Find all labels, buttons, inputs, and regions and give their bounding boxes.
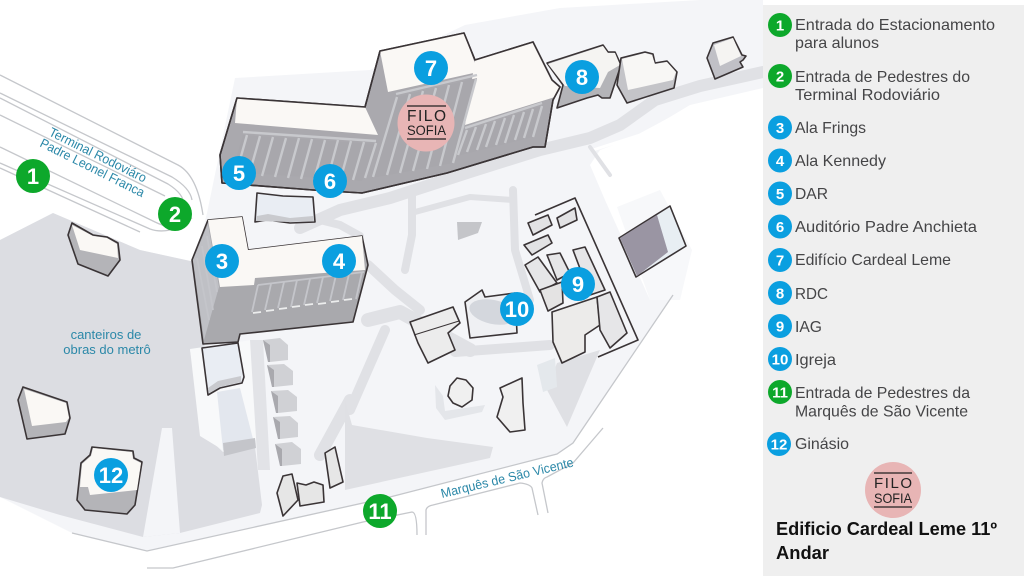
map marker 9 <box>561 267 595 301</box>
map marker 4: 4 <box>333 249 346 274</box>
legend item 2 <box>768 64 970 104</box>
logo on map: Filosofia: FILO <box>407 108 446 125</box>
building: spiky pavilion <box>497 378 525 432</box>
roads: Terminal Rodoviário <box>0 75 203 232</box>
legend item 5 <box>768 182 828 206</box>
map marker 8: 8 <box>576 65 588 90</box>
building: east of RDC <box>617 52 677 103</box>
buildings: row of five blocks <box>263 338 301 466</box>
legend item 11: Marquês de São Vicente <box>795 404 968 420</box>
building: round pavilion <box>448 378 473 407</box>
legend item 7: 7 <box>776 252 784 270</box>
building: Ala Frings and Ala Kennedy <box>192 217 368 344</box>
legend item 3: Ala Frings <box>795 120 866 137</box>
building: Ginásio <box>77 447 142 514</box>
legend item 6: Auditório Padre Anchieta <box>795 219 977 236</box>
building: DAR annex <box>255 193 315 223</box>
legend item 10 <box>768 347 836 371</box>
sculpture <box>457 222 482 240</box>
building: west block <box>18 387 70 439</box>
logo in legend: Filosofia <box>865 462 921 518</box>
map marker 2 <box>158 197 192 231</box>
legend item 3 <box>768 116 866 140</box>
logo in legend: Filosofia: FILO <box>874 475 912 492</box>
label: canteiros de obras do metrô: obras do metrô <box>63 342 151 357</box>
legend item 9: 9 <box>776 318 784 336</box>
map marker 6: 6 <box>324 169 336 194</box>
building: Edifício Cardeal Leme and Auditório <box>220 33 560 193</box>
building: below Ala Frings <box>202 343 256 456</box>
map marker 2: 2 <box>169 202 181 227</box>
map marker 3 <box>205 244 239 278</box>
legend item 3: 3 <box>776 120 784 137</box>
building: small pale block <box>537 358 557 392</box>
roads: Marquês de São Vicente <box>72 295 673 568</box>
legend item 5: 5 <box>776 186 784 203</box>
legend item 10: 10 <box>772 352 788 368</box>
legend item 6 <box>768 214 977 238</box>
map marker 11: 11 <box>368 499 392 524</box>
map marker 5 <box>222 156 256 190</box>
buildings: south cluster <box>277 447 343 516</box>
IAG complex <box>524 198 638 363</box>
legend item 6: 6 <box>776 219 784 236</box>
legend item 1 <box>768 13 995 52</box>
legend item 12: 12 <box>771 436 787 454</box>
building: west of Igreja <box>410 307 460 363</box>
legend item 5: DAR <box>795 186 828 203</box>
map marker 4 <box>322 244 356 278</box>
legend item 8: 8 <box>776 286 784 302</box>
label: Padre Leonel Franca: Padre Leonel Franca <box>38 135 148 200</box>
legend item 8 <box>768 281 828 305</box>
label: Marquês de São Vicente: Marquês de São Vicente <box>439 455 575 501</box>
legend item 7 <box>768 248 951 272</box>
legend item 8: RDC <box>795 286 828 303</box>
map marker 9: 9 <box>572 272 584 297</box>
map marker 7: 7 <box>425 56 437 81</box>
logo in legend: Filosofia: SOFIA <box>874 490 913 506</box>
building: northeast <box>707 37 746 79</box>
building: Igreja <box>465 290 519 338</box>
logo on map: Filosofia: SOFIA <box>407 122 447 138</box>
legend item 1: Entrada do Estacionamento <box>795 17 995 34</box>
map marker 7 <box>414 51 448 85</box>
legend item 1: para alunos <box>795 35 879 52</box>
logo on map: Filosofia <box>398 94 454 152</box>
map marker 12: 12 <box>99 463 123 488</box>
building: RDC <box>547 45 621 108</box>
legend item 9: IAG <box>795 319 822 336</box>
legend item 10: Igreja <box>795 352 836 369</box>
legend item 4 <box>768 148 886 172</box>
legend item 7: Edifício Cardeal Leme <box>795 252 951 269</box>
building: dark block <box>619 206 686 277</box>
legend item 2: Entrada de Pedestres do <box>795 69 970 86</box>
label: canteiros de obras do metrô: canteiros de <box>71 327 141 342</box>
legend item 1: 1 <box>776 18 784 34</box>
map: ground and paths <box>0 0 763 551</box>
map marker 3: 3 <box>216 249 228 274</box>
legend item 11 <box>768 380 970 420</box>
map marker 12 <box>94 458 128 492</box>
map marker 1: 1 <box>27 164 39 189</box>
legend item 2: 2 <box>776 68 784 86</box>
map marker 11 <box>363 494 397 528</box>
legend item 12: Ginásio <box>795 436 849 453</box>
map marker 6 <box>313 164 347 198</box>
legend item 4: 4 <box>776 153 785 170</box>
building: near entrance 1 <box>68 223 120 276</box>
map marker 10 <box>500 292 534 326</box>
map marker 8 <box>565 60 599 94</box>
map marker 5: 5 <box>233 161 245 186</box>
location note: Andar <box>776 543 829 563</box>
legend item 4: Ala Kennedy <box>795 153 886 170</box>
panel: legend <box>763 5 1024 576</box>
legend item 2: Terminal Rodoviário <box>795 87 940 104</box>
legend item 12 <box>767 432 849 456</box>
legend item 11: 11 <box>772 384 788 402</box>
map marker 1 <box>16 159 50 193</box>
location note: Edificio Cardeal Leme 11º <box>776 519 997 539</box>
map marker 10: 10 <box>505 297 529 322</box>
legend item 9 <box>768 314 822 338</box>
label: Terminal Rodoviário: Terminal Rodoviáro <box>47 124 149 185</box>
legend item 11: Entrada de Pedestres da <box>795 385 970 402</box>
